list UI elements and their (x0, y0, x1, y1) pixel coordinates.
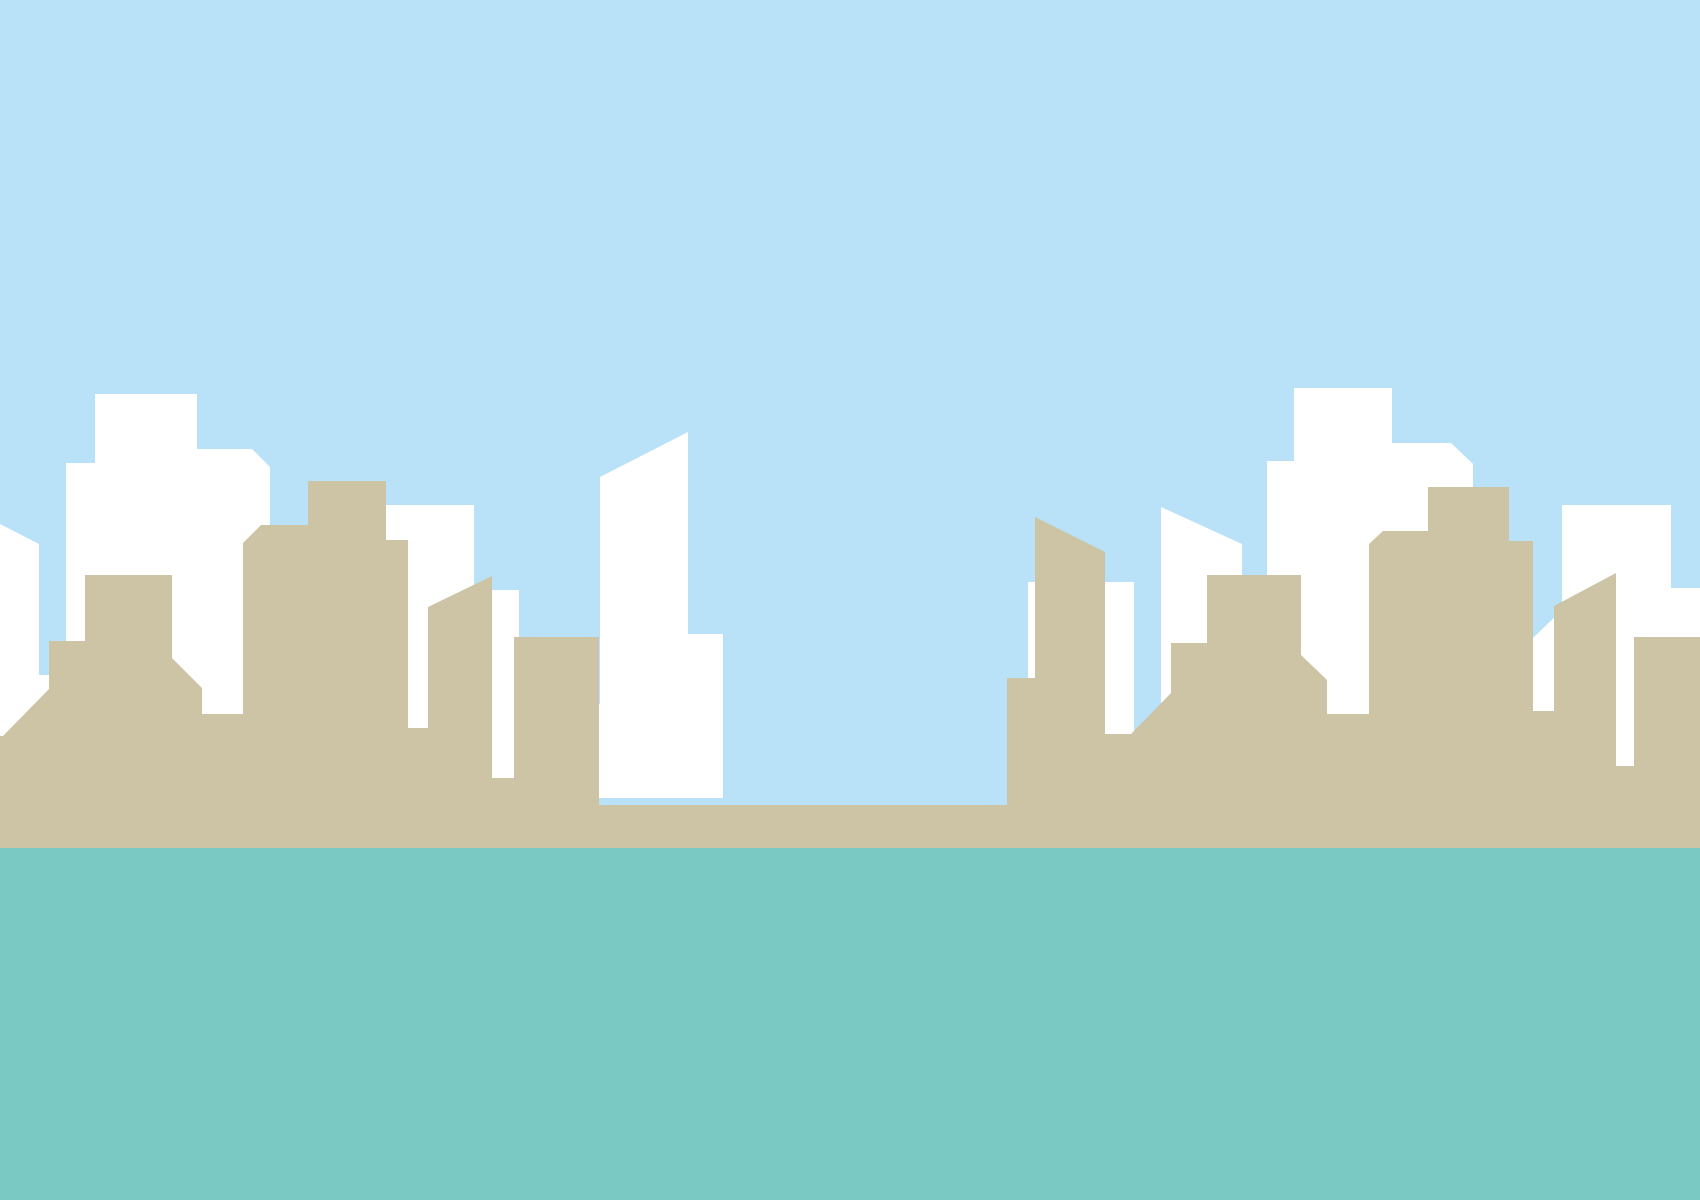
building: far right block (1533, 505, 1700, 800)
building: narrow block (492, 590, 519, 790)
white background buildings (0, 388, 1700, 800)
building: right stepped tower (1267, 388, 1473, 730)
building: left stepped tower (66, 394, 270, 760)
tan foreground skyline (0, 481, 1700, 850)
building: left mid block (386, 505, 474, 760)
building: right narrow block (1028, 582, 1134, 752)
sky background (0, 0, 1700, 850)
teal water (0, 848, 1700, 1200)
building: far left slanted tower (0, 524, 49, 800)
building: right slanted tower (1161, 507, 1242, 720)
building: central left tower (599, 432, 723, 798)
